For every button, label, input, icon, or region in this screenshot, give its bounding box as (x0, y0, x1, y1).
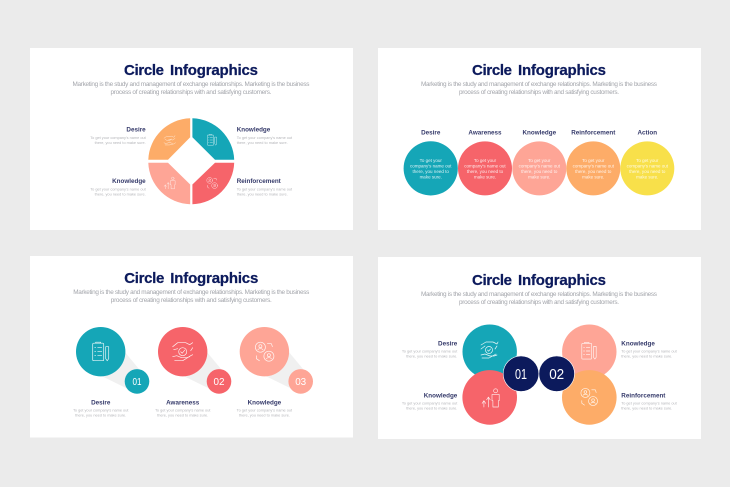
icon: swap people (581, 388, 598, 406)
segment: salmon (148, 163, 190, 204)
subtitle: Marketing is the study and management of exchange relationships. Marketing is the business (421, 81, 657, 88)
step 01 (73, 327, 149, 418)
label: Desire: To get your company's name out (402, 350, 458, 354)
column: Knowledge: Knowledge (523, 130, 557, 136)
column: Reinforcement: Reinforcement (571, 130, 616, 136)
badge 01 (503, 356, 539, 392)
column: Reinforcement: To get your (582, 158, 605, 163)
label: Desire (90, 126, 147, 145)
label: Knowledge bottom left: there, you need to make sure. (95, 192, 146, 196)
icon: clipboard (207, 134, 217, 145)
label: Knowledge left (402, 392, 458, 410)
column: Knowledge (512, 130, 566, 195)
icon: swap people (255, 342, 274, 361)
subtitle: Marketing is the study and management of exchange relationships. Marketing is the business (73, 289, 309, 296)
icon: clipboard (582, 342, 596, 359)
column: Reinforcement (566, 130, 620, 195)
title: Circle (124, 270, 164, 287)
column: Action: company's name out (627, 163, 669, 168)
subtitle (73, 289, 309, 304)
column: Awareness: To get your (474, 158, 497, 163)
column: Reinforcement: there, you need to (575, 169, 612, 174)
subtitle (72, 81, 310, 96)
step 01: Desire (91, 400, 111, 406)
icon: person and arrows (164, 177, 175, 189)
subtitle (421, 81, 657, 96)
column: Action: there, you need to (629, 169, 666, 174)
label: Knowledge bottom left (90, 178, 147, 196)
icon: hands (481, 342, 498, 358)
panel: overlapping circles (378, 257, 701, 439)
column: Action: make sure. (636, 174, 658, 179)
column: Awareness: make sure. (474, 174, 496, 179)
label: Reinforcement: there, you need to make sure. (237, 192, 288, 196)
icon: hands (164, 136, 176, 145)
label: Knowledge right: there, you need to make sure. (621, 355, 672, 359)
label: Reinforcement (621, 392, 678, 410)
label: Knowledge top right: To get your company's name out (237, 136, 293, 140)
label: Knowledge top right (237, 126, 293, 145)
column: Awareness: there, you need to (467, 169, 504, 174)
step 03: there, you need to make sure. (239, 414, 290, 418)
segment: teal (192, 118, 234, 160)
subtitle: process of creating relationships with and satisfying customers. (459, 299, 619, 306)
column: Knowledge: To get your (528, 158, 551, 163)
label: Knowledge right: Knowledge (621, 340, 655, 348)
title: Infographics (518, 62, 606, 79)
column: Action: To get your (636, 158, 659, 163)
title: Infographics (170, 270, 258, 287)
column: Desire: To get your (420, 158, 442, 163)
badge 02 (539, 356, 574, 392)
column: Knowledge: make sure. (528, 174, 550, 179)
step 02: Awareness (166, 400, 200, 406)
label: Reinforcement (237, 178, 293, 196)
icon: clipboard (93, 342, 109, 361)
title: Circle (472, 62, 512, 79)
segment: red (192, 163, 234, 204)
step 02: 02 (214, 377, 225, 388)
label: Knowledge right (621, 340, 678, 359)
column: Awareness (458, 130, 512, 195)
badge 02: 02 (549, 367, 564, 383)
label: Desire: Desire (438, 340, 458, 348)
column: Reinforcement: company's name out (573, 163, 615, 168)
column: Awareness: company's name out (464, 163, 506, 168)
label: Reinforcement: To get your company's name out (237, 188, 293, 192)
column: Action: Action (638, 130, 657, 136)
label: Knowledge left: Knowledge (424, 392, 458, 399)
step 02: To get your company's name out (155, 408, 211, 412)
panel: three numbered circles (30, 256, 353, 438)
step 01: there, you need to make sure. (75, 414, 126, 418)
label: Knowledge top right: Knowledge (237, 126, 271, 134)
label: Reinforcement: there, you need to make sure. (621, 406, 672, 410)
segment: orange (148, 118, 190, 160)
subtitle: Marketing is the study and management of exchange relationships. Marketing is the business (72, 81, 310, 88)
circle: teal (462, 324, 517, 379)
step 03: 03 (295, 377, 307, 388)
label: Knowledge left: To get your company's name out (402, 402, 458, 406)
label: Desire: To get your company's name out (90, 136, 147, 140)
column: Desire: Desire (421, 130, 441, 136)
circle: salmon (562, 324, 616, 379)
column: Desire (404, 130, 458, 195)
title: Circle (124, 62, 164, 79)
label: Reinforcement: Reinforcement (237, 178, 282, 185)
label: Desire: there, you need to make sure. (95, 141, 146, 145)
step 03: To get your company's name out (237, 408, 293, 412)
title: Circle (472, 272, 512, 289)
label: Desire: there, you need to make sure. (406, 355, 457, 359)
column: Action (620, 130, 674, 195)
column: Desire: make sure. (420, 174, 442, 179)
label: Knowledge top right: there, you need to make sure. (237, 141, 288, 145)
subtitle: process of creating relationships with and satisfying customers. (459, 89, 619, 96)
step 02 (155, 327, 231, 418)
circle: orange (562, 370, 617, 425)
label: Knowledge bottom left: To get your company's name out (90, 188, 147, 192)
step 01: To get your company's name out (73, 408, 129, 412)
column: Desire: there, you need to (413, 169, 449, 174)
label: Knowledge bottom left: Knowledge (112, 178, 146, 185)
badge 01: 01 (515, 367, 527, 383)
label: Reinforcement: Reinforcement (621, 392, 666, 399)
column: Desire: company's name out (410, 163, 452, 168)
label: Knowledge left: there, you need to make sure. (406, 406, 457, 410)
title: Infographics (518, 272, 606, 289)
column: Awareness: Awareness (468, 130, 502, 136)
step 03: Knowledge (248, 400, 282, 406)
icon: swap people (207, 177, 218, 189)
icon: hands (173, 343, 193, 361)
panel: quadrant donut (30, 48, 353, 230)
label: Desire: Desire (126, 126, 146, 134)
column: Knowledge: company's name out (519, 163, 561, 168)
subtitle: process of creating relationships with and satisfying customers. (111, 297, 272, 304)
subtitle: process of creating relationships with and satisfying customers. (110, 89, 272, 96)
column: Knowledge: there, you need to (521, 169, 558, 174)
label: Desire (402, 340, 458, 359)
circle: red (462, 370, 517, 425)
step 02: there, you need to make sure. (157, 414, 208, 418)
label: Knowledge right: To get your company's name out (621, 350, 678, 354)
column: Reinforcement: make sure. (582, 174, 604, 179)
subtitle (421, 291, 657, 306)
label: Reinforcement: To get your company's name out (621, 402, 678, 406)
subtitle: Marketing is the study and management of exchange relationships. Marketing is the business (421, 291, 657, 298)
icon: person and arrows (482, 389, 499, 407)
step 01: 01 (132, 377, 142, 388)
step 03 (237, 327, 313, 418)
title: Infographics (170, 62, 258, 79)
panel: five circles (378, 48, 701, 230)
